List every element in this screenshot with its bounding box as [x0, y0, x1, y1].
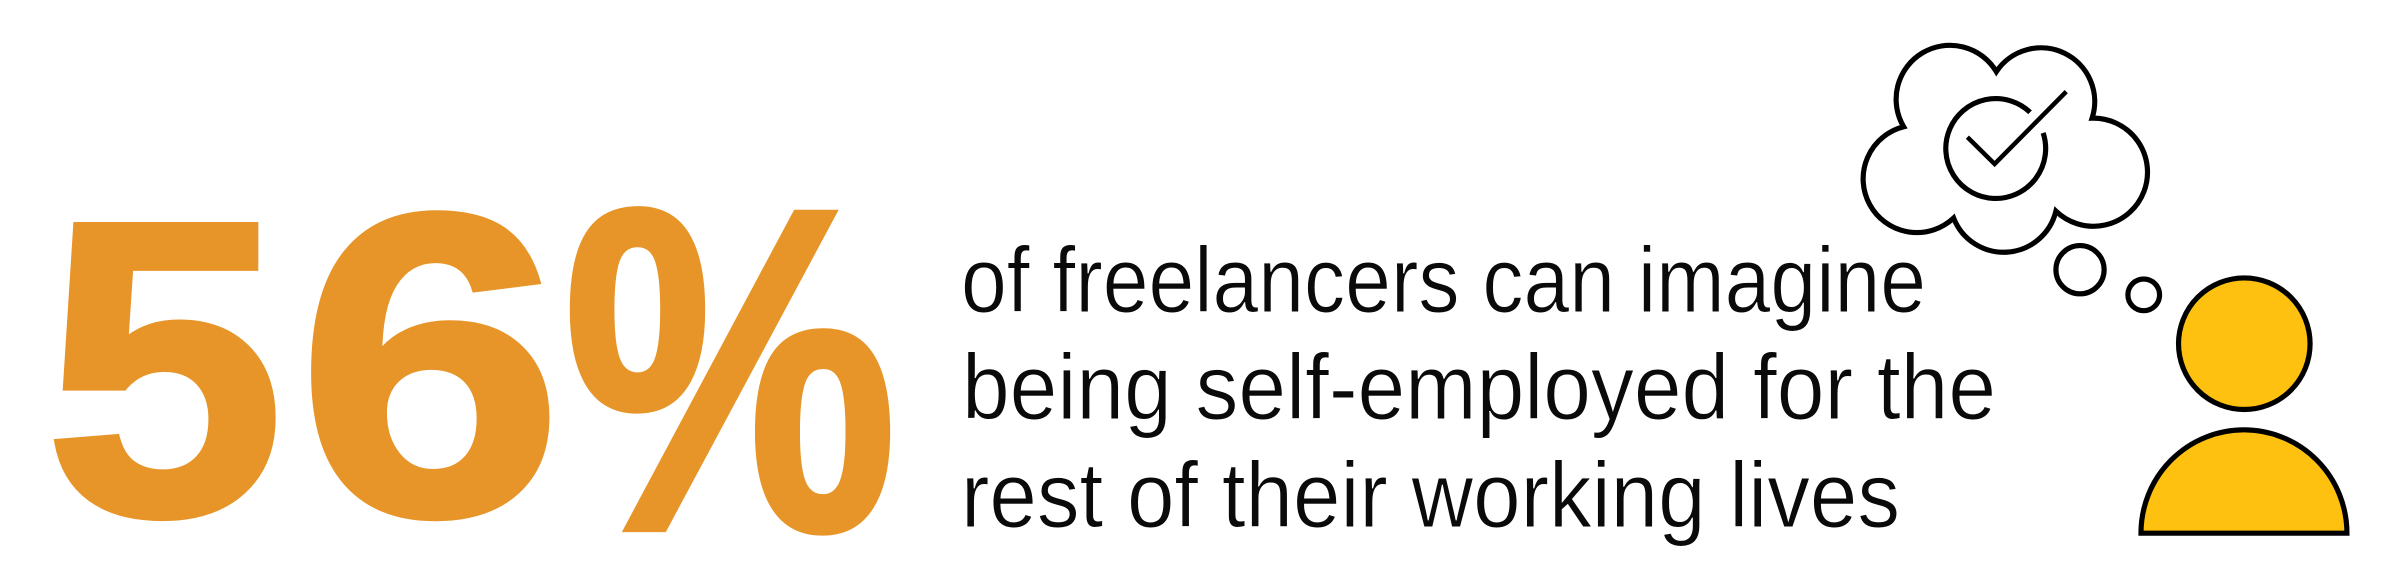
statement text: being self-employed for the: [962, 335, 1996, 439]
statement text: rest of their working lives: [961, 443, 1900, 547]
statement text: [961, 228, 1996, 547]
icon: small thought bubble: [2128, 279, 2160, 311]
big statistic: 56%: [44, 114, 898, 572]
icon: thought cloud: [1863, 45, 2148, 252]
icon: person thinking of a check mark: [1863, 45, 2347, 533]
icon: large thought bubble: [2056, 246, 2104, 294]
statement text: of freelancers can imagine: [961, 228, 1926, 332]
icon: person head: [2179, 278, 2310, 410]
icon: person body: [2141, 430, 2347, 533]
icon: check mark in circle: [1946, 92, 2066, 198]
